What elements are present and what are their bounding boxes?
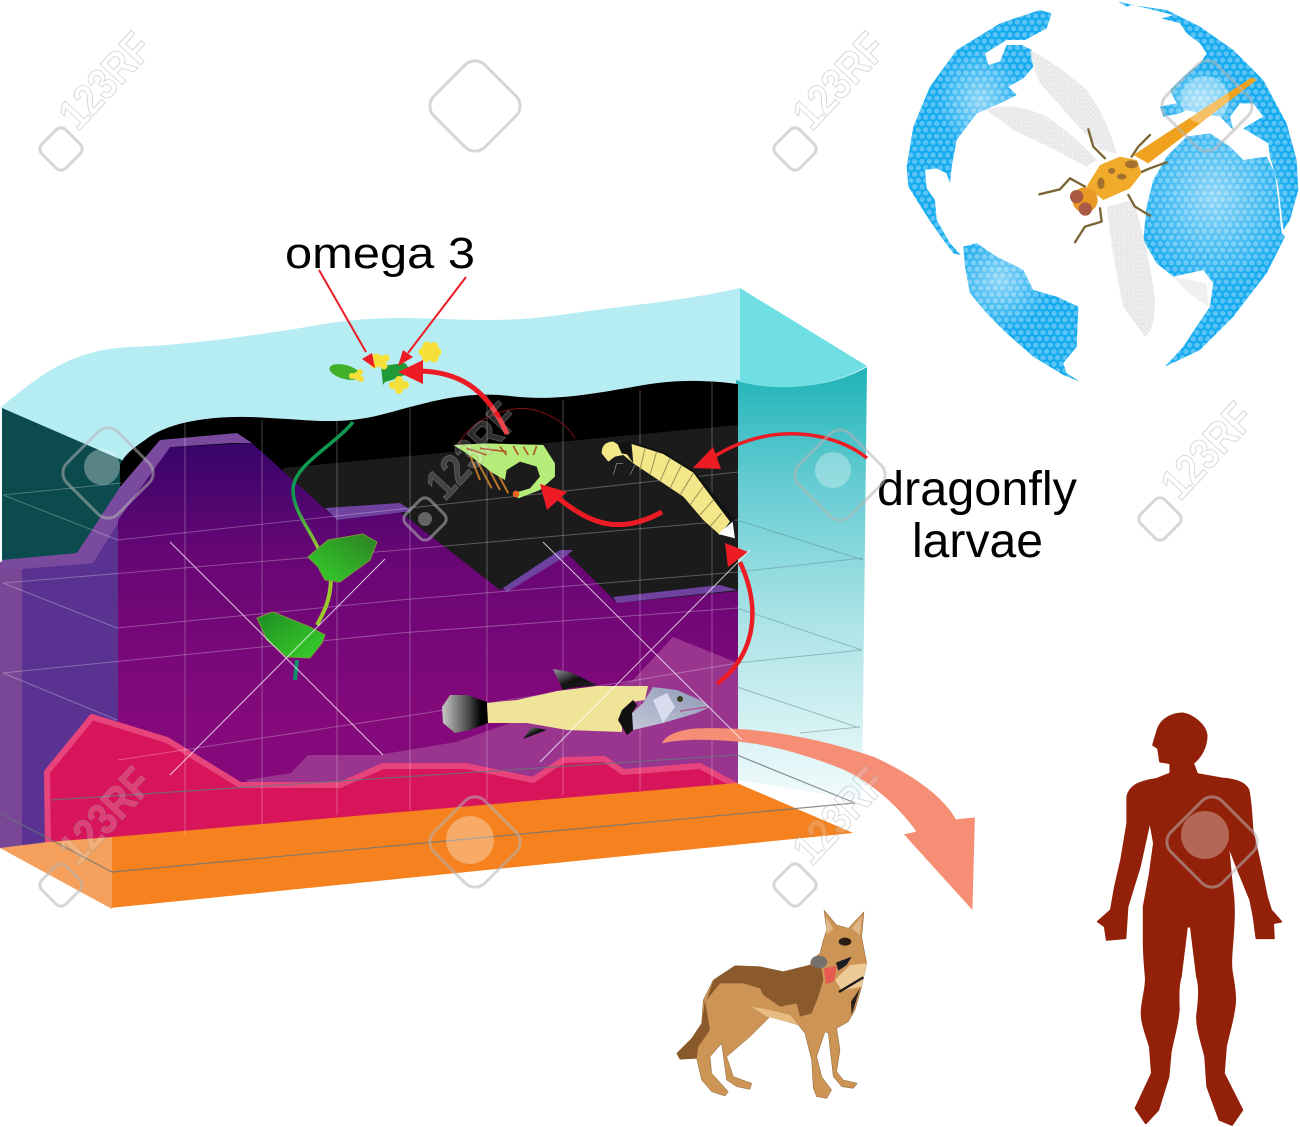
dragonfly wings: [987, 50, 1208, 337]
plant lower stem: [317, 580, 331, 625]
dragonfly thorax spots: [1097, 160, 1138, 189]
left purple edge: [0, 560, 22, 848]
tank frame lines: [0, 755, 855, 872]
pink hill: [47, 717, 735, 850]
right water top: [740, 288, 867, 387]
plant root: [295, 660, 297, 680]
arrow shrimp to plant: [420, 371, 507, 434]
dog chest mark: [851, 988, 860, 1015]
larva segments: [640, 448, 722, 527]
right wall lines: [737, 520, 863, 733]
watermarks: 123RF: [1151, 393, 1264, 509]
fish head: [632, 687, 710, 730]
fish bottom fin: [523, 727, 547, 739]
larva back spikes: [632, 442, 735, 527]
upper leaf: [308, 534, 377, 582]
dog belly light: [752, 1007, 798, 1025]
lower back panel: [283, 425, 738, 610]
purple hill top band: [160, 433, 252, 447]
purple ridge bands: [325, 503, 737, 603]
dog cheek: [835, 963, 867, 991]
dragonfly larva: [602, 442, 735, 538]
orange floor side: [0, 837, 112, 909]
shrimp legs: [470, 455, 508, 493]
watermarks: 123RF: [49, 758, 162, 874]
arrow to omega 3 left: [319, 270, 366, 352]
arrowhead larva tail: [725, 543, 748, 567]
black back panel: [120, 381, 738, 610]
arrow fish to larva: [717, 562, 752, 684]
plant stem: [293, 422, 353, 548]
dog inner ears: [826, 917, 862, 935]
translucent purple hill: [247, 637, 738, 810]
dog muzzle: [811, 956, 827, 968]
arrow label to larva: [712, 434, 867, 458]
fish cheek: [653, 693, 675, 723]
dog collar: [839, 977, 863, 992]
left purple wall: [0, 487, 122, 848]
globe with dragonfly: [900, 0, 1300, 383]
larva body: [632, 444, 730, 535]
dog tongue: [824, 966, 837, 984]
dog body: [677, 910, 867, 1098]
arrows: [319, 270, 867, 684]
right water wall: [736, 367, 867, 800]
label: larvae: larvae: [912, 515, 1043, 568]
water surface: [0, 288, 740, 466]
arrowhead left: [362, 353, 375, 368]
dragonfly abdomen: [1133, 77, 1257, 163]
label: omega 3: omega 3: [285, 229, 475, 278]
dog mouth: [836, 957, 852, 971]
dog eye: [839, 938, 851, 946]
shrimp antenna: [458, 408, 575, 448]
purple wall ridge: [2, 440, 175, 570]
human silhouette: [1098, 713, 1281, 1125]
shrimp stripes: [467, 446, 537, 455]
watermarks: 123RF: [783, 758, 896, 874]
dog tail shade: [677, 1000, 710, 1059]
fish mouth: [680, 707, 707, 711]
lower leaf: [257, 612, 325, 658]
salmon arrow to consumers: [662, 728, 975, 910]
aquarium diagram: [0, 288, 867, 909]
left dark water panel: [2, 408, 122, 562]
arrowhead shrimp: [540, 484, 567, 510]
larva legs: [613, 463, 635, 475]
dog: [677, 910, 867, 1098]
fish gill: [618, 700, 637, 735]
fish body: [487, 686, 648, 732]
label: dragonfly: dragonfly: [877, 463, 1077, 516]
watermarks: 123RF: [49, 23, 162, 139]
shrimp tail tip: [513, 491, 519, 497]
larva tail: [718, 522, 735, 538]
floating leaves and flowers: [328, 342, 442, 394]
water lily plant: [257, 342, 442, 680]
arrow larva to shrimp: [556, 496, 662, 525]
dragonfly legs: [1039, 129, 1167, 242]
dog saddle: [707, 965, 823, 1017]
fish top fin: [553, 669, 597, 690]
fish: [442, 669, 710, 739]
arrowhead right: [398, 350, 413, 366]
arrow to omega 3 right: [408, 277, 466, 353]
dragonfly thorax: [1087, 157, 1142, 200]
dragonfly head: [1070, 187, 1098, 216]
shrimp body: [453, 443, 555, 498]
orange floor front: [110, 783, 853, 908]
arrowhead larva: [693, 447, 721, 469]
fish tail: [442, 695, 488, 733]
shrimp: [453, 408, 575, 498]
fish eye: [677, 696, 683, 702]
purple hill front: [118, 443, 738, 840]
watermarks: 123RF: [783, 23, 896, 139]
tank grid lines: [3, 382, 738, 835]
watermarks: [37, 23, 1264, 909]
larva head: [602, 442, 633, 463]
arrowhead plant: [398, 360, 423, 384]
globe continents: [900, 0, 1300, 383]
watermarks: 123RF: [416, 393, 529, 509]
